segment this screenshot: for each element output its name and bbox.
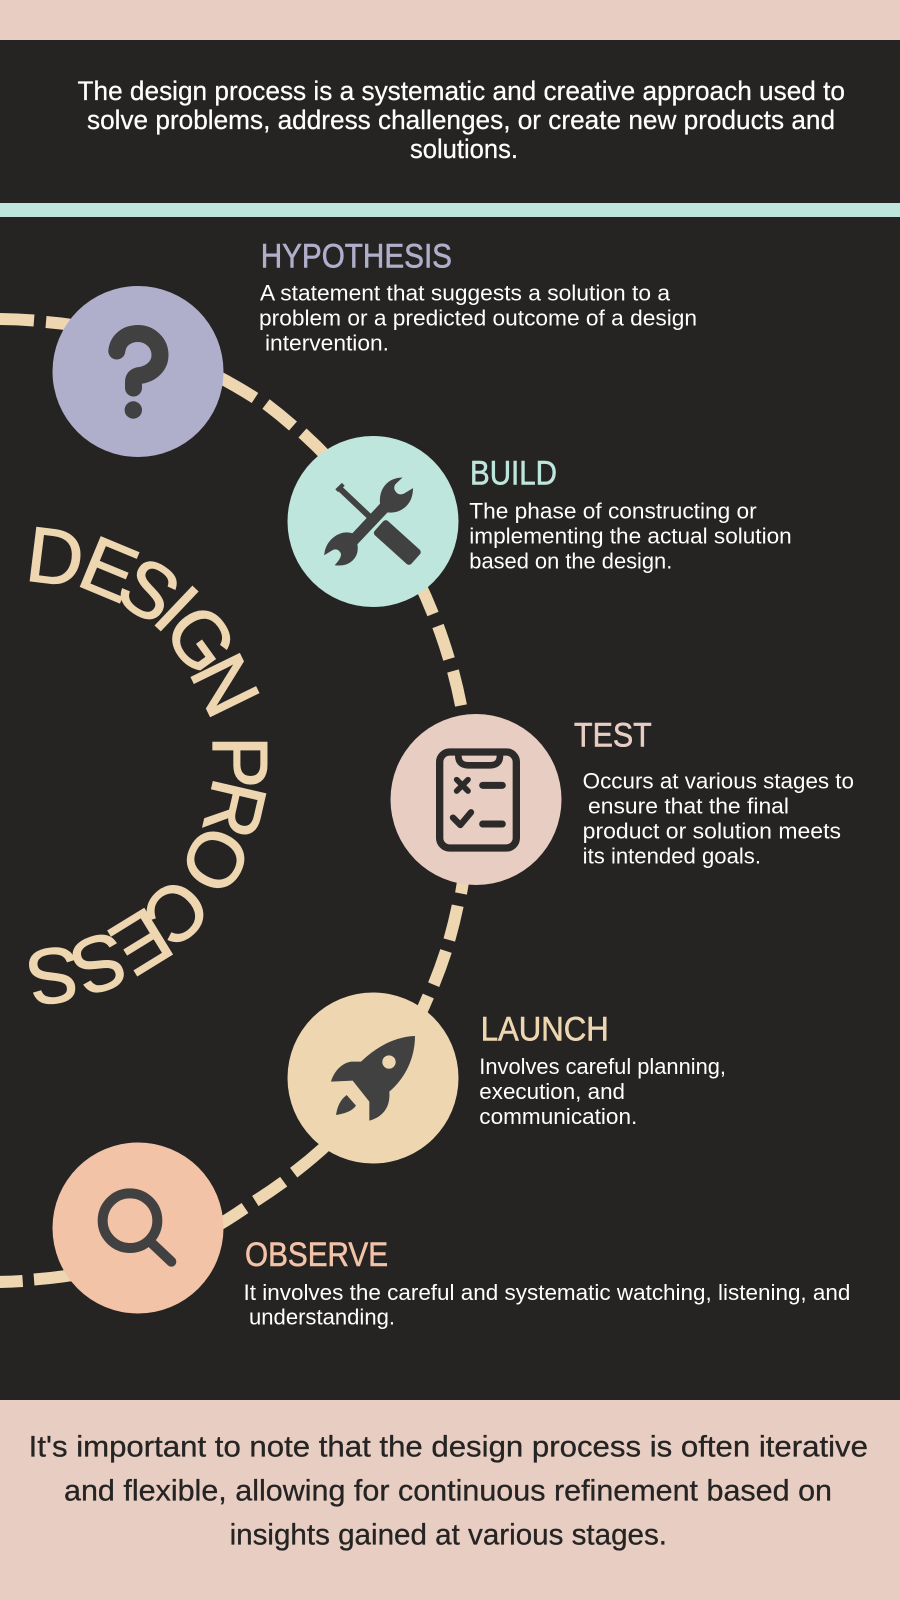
icon: clipboard checklist <box>440 752 516 848</box>
description: build: implementing the actual solution <box>469 523 792 548</box>
description: hypothesis: problem or a predicted outcome of a design <box>259 306 697 331</box>
description: test: product or solution meets <box>583 818 841 843</box>
top pink band <box>0 0 900 40</box>
description: build <box>469 498 792 573</box>
curved title: DESIGN PROCESS: DESIGN PROCESS <box>22 510 284 1022</box>
intro text: solutions. <box>410 134 518 164</box>
closing note: insights gained at various stages. <box>230 1518 667 1551</box>
description: launch: execution, and <box>479 1079 625 1104</box>
circle: test <box>390 714 562 885</box>
icon: rocket <box>331 1036 415 1121</box>
heading: hypothesis: HYPOTHESIS <box>261 237 452 275</box>
circle: build <box>288 436 458 607</box>
closing note <box>29 1431 868 1551</box>
heading: build: BUILD <box>470 454 557 492</box>
description: observe: understanding. <box>249 1304 395 1329</box>
description: build: based on the design. <box>469 548 672 573</box>
icon: question mark <box>117 334 160 419</box>
icon: wrench and screwdriver <box>325 478 422 566</box>
step: observe <box>52 1142 850 1329</box>
circle: launch <box>288 992 458 1164</box>
description: test <box>583 768 854 868</box>
circle: hypothesis <box>52 286 224 457</box>
intro text: The design process is a systematic and creative approach used to <box>78 76 845 106</box>
closing note: and flexible, allowing for continuous refinement based on <box>64 1475 832 1508</box>
teal divider band <box>0 203 900 217</box>
description: build: The phase of constructing or <box>469 498 757 523</box>
description: observe: It involves the careful and systematic watching, listening, and <box>244 1280 850 1305</box>
bottom panel <box>0 1400 900 1600</box>
description: test: Occurs at various stages to <box>583 768 854 793</box>
description: launch: Involves careful planning, <box>479 1054 726 1079</box>
description: observe <box>244 1280 850 1329</box>
description: hypothesis <box>259 281 697 356</box>
heading: launch: LAUNCH <box>481 1011 609 1049</box>
description: hypothesis: A statement that suggests a solution to a <box>260 281 671 306</box>
description: test: ensure that the final <box>588 793 789 818</box>
closing note: It's important to note that the design process is often iterative <box>29 1431 868 1464</box>
dashed arc connecting the steps <box>0 319 464 1282</box>
step: test <box>390 714 854 885</box>
circle: observe <box>52 1142 224 1314</box>
heading: observe: OBSERVE <box>245 1236 388 1274</box>
description: launch: communication. <box>479 1104 637 1129</box>
step: build <box>288 436 792 607</box>
intro text: solve problems, address challenges, or create new products and <box>87 105 835 135</box>
icon: magnifying glass <box>103 1193 171 1262</box>
description: test: its intended goals. <box>583 843 761 868</box>
step: hypothesis <box>52 237 697 457</box>
step: launch <box>288 992 726 1164</box>
description: hypothesis: intervention. <box>265 331 389 356</box>
intro text <box>78 76 845 164</box>
heading: test: TEST <box>574 717 652 755</box>
description: launch <box>479 1054 726 1129</box>
